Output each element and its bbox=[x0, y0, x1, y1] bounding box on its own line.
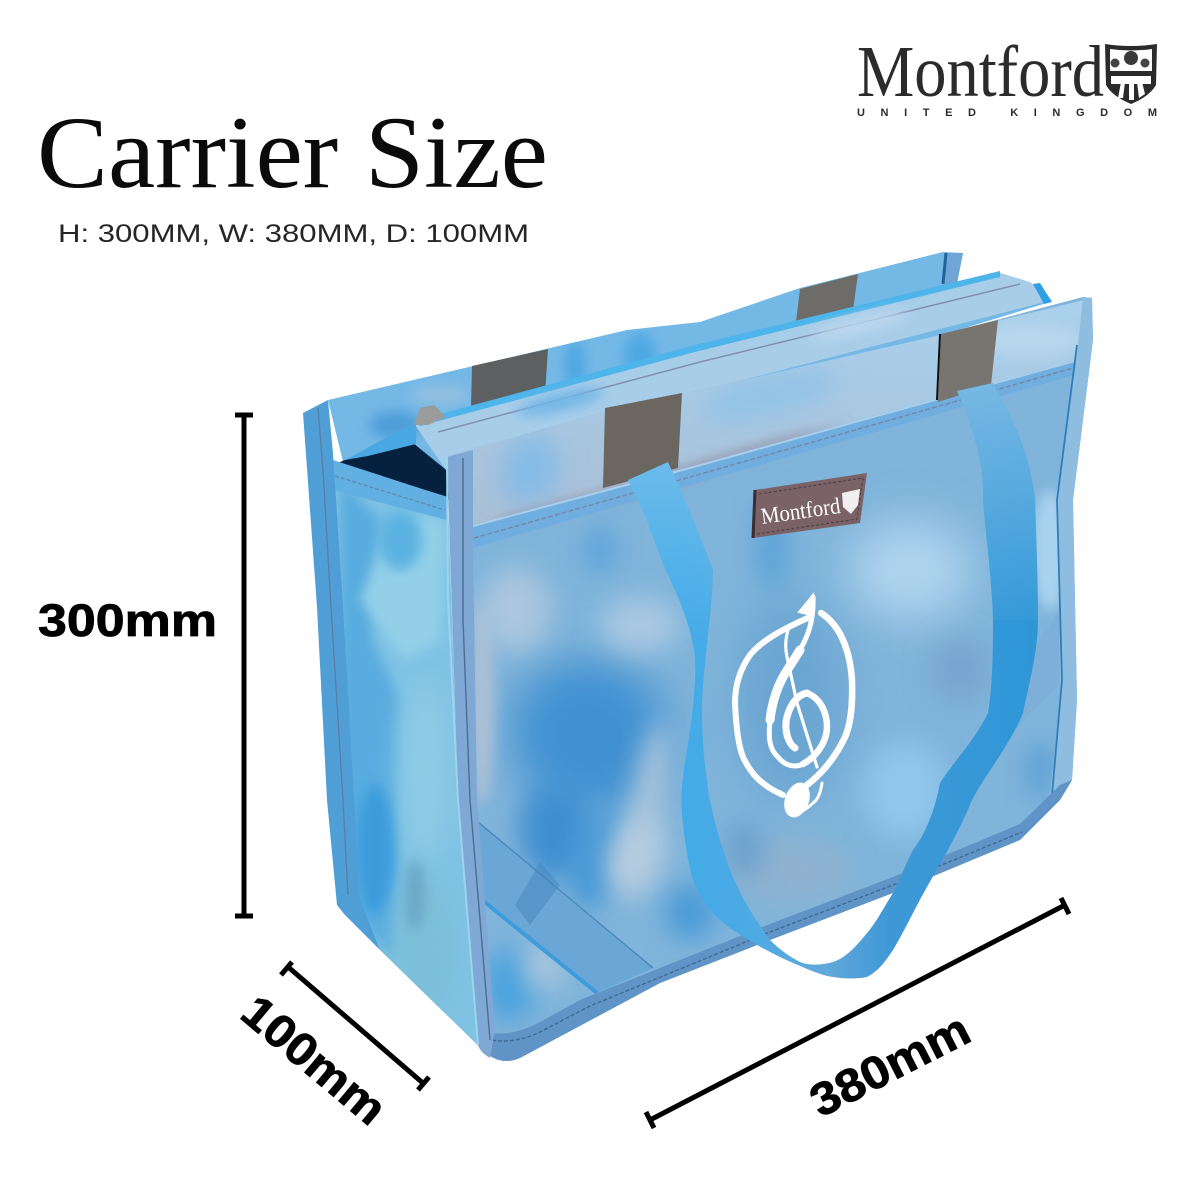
front right binding bbox=[1050, 297, 1093, 800]
leather brand label bbox=[753, 473, 867, 538]
subtitle dimensions: H: 300MM, W: 380MM, D: 100MM bbox=[58, 220, 529, 248]
top pocket above band bbox=[448, 298, 1092, 530]
side panel bbox=[328, 460, 495, 1062]
zipper pull bbox=[414, 405, 446, 425]
title: Carrier Size bbox=[37, 96, 548, 210]
bag back panel bbox=[328, 252, 1050, 470]
width label: 380mm bbox=[801, 1003, 978, 1127]
corner gusset left bbox=[478, 822, 653, 993]
logo shield bbox=[1105, 44, 1157, 104]
leather brand label: Montford bbox=[759, 493, 842, 529]
zipper panel bbox=[345, 271, 1052, 473]
treble clef logo bbox=[735, 595, 852, 821]
side opening dark interior bbox=[335, 443, 450, 500]
front handle tabs bbox=[603, 320, 998, 488]
depth dimension line bbox=[281, 962, 429, 1090]
depth label: 100mm bbox=[232, 985, 397, 1135]
front left binding bbox=[447, 450, 495, 1058]
bag front panel bbox=[447, 297, 1093, 1061]
back handle tabs bbox=[471, 274, 858, 408]
corner gusset right bbox=[957, 610, 1063, 785]
width dimension line bbox=[646, 898, 1069, 1128]
pocket band bbox=[473, 358, 1082, 548]
front bottom binding bbox=[478, 780, 1072, 1061]
front fabric shading bbox=[448, 298, 1092, 1021]
tote bag photo bbox=[303, 252, 1093, 1062]
height dimension line bbox=[235, 415, 253, 916]
logo: Montford United Kingdom: Montford bbox=[857, 31, 1104, 112]
side left binding bbox=[303, 400, 380, 950]
side top band bbox=[333, 460, 447, 520]
shoulder strap bbox=[628, 383, 1038, 978]
height label: 300mm bbox=[38, 595, 217, 646]
logo: Montford United Kingdom: UNITED KINGDOM bbox=[857, 107, 1157, 119]
